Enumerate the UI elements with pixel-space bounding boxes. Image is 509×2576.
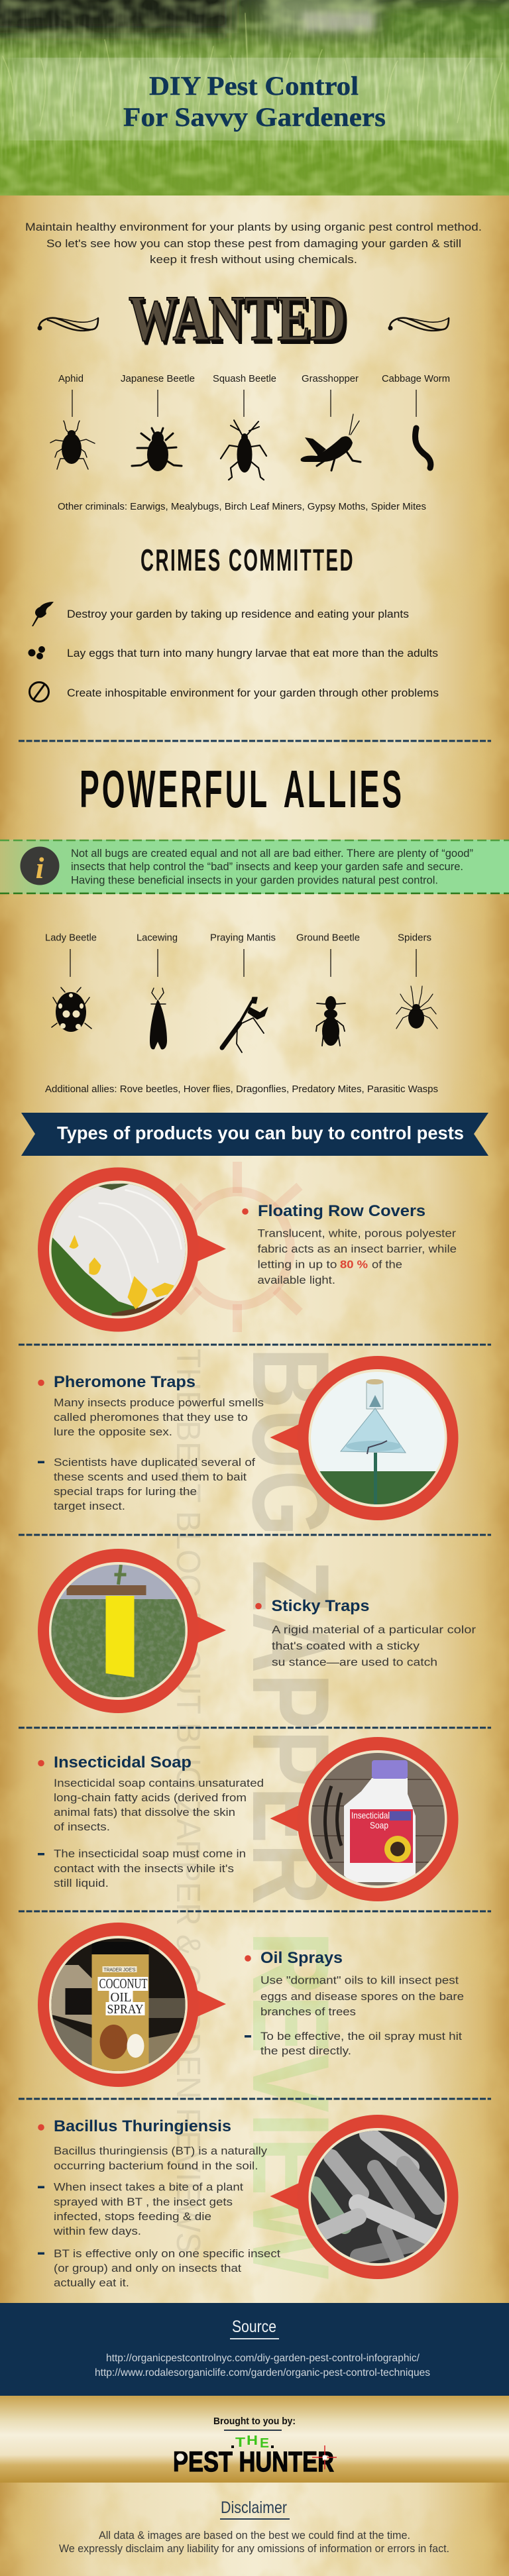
floating row covers text: Floating Row Covers bbox=[258, 1202, 425, 1220]
photo: coconut oil spray: OIL bbox=[110, 1990, 131, 2005]
intro text: So let's see how you can stop these pest from damaging your garden & still bbox=[46, 237, 461, 250]
ornament: right flourish bbox=[388, 318, 449, 331]
translucent title band bbox=[0, 58, 509, 140]
crime list: Create inhospitable environment for your garden through other problems bbox=[67, 687, 439, 699]
insecticidal soap text: Insecticidal Soap bbox=[54, 1754, 192, 1771]
sticky traps text: su stance—are used to catch bbox=[272, 1655, 437, 1669]
ally labels: Spiders bbox=[398, 932, 431, 944]
photo: floating row cover bbox=[38, 1168, 226, 1332]
icon: cabbage worm bbox=[415, 428, 431, 468]
logo: the pest hunter: E bbox=[260, 2436, 269, 2451]
pest labels: Aphid bbox=[58, 373, 84, 384]
oil sprays text: eggs and disease spores on the bare bbox=[260, 1990, 464, 2003]
pest labels: Japanese Beetle bbox=[121, 373, 195, 384]
bacillus thuringiensis text: occurring bacterium found in the soil. bbox=[54, 2159, 258, 2172]
bacillus thuringiensis text: infected, stops feeding & die bbox=[54, 2210, 211, 2223]
bacillus thuringiensis text: Bacillus thuringiensis (BT) is a naturally bbox=[54, 2145, 268, 2157]
pheromone traps text: special traps for luring the bbox=[54, 1485, 197, 1498]
wanted heading: WANTED bbox=[130, 286, 349, 357]
icon: japanese beetle bbox=[132, 428, 182, 471]
disclaimer bbox=[59, 2498, 449, 2555]
insecticidal soap text: contact with the insects while it's bbox=[54, 1862, 234, 1875]
insecticidal soap text: The insecticidal soap must come in bbox=[54, 1848, 246, 1860]
logo: the pest hunter: PEST HUNTER bbox=[173, 2446, 334, 2478]
photo: coconut oil spray: SPRAY bbox=[107, 2002, 143, 2017]
crime list bbox=[28, 602, 439, 701]
floating row covers text: available light. bbox=[257, 1274, 335, 1286]
source section: Source bbox=[232, 2318, 276, 2336]
title bbox=[123, 71, 386, 132]
photo: sticky trap bbox=[38, 1549, 226, 1713]
icon: lacewing bbox=[150, 988, 167, 1050]
header: grass photo bbox=[0, 0, 509, 196]
photo: pheromone trap bbox=[270, 1356, 459, 1520]
photo: insecticidal soap bottle: Insecticidal bbox=[351, 1810, 390, 1820]
bacillus thuringiensis text: When insect takes a bite of a plant bbox=[54, 2180, 243, 2194]
oil sprays text: the pest directly. bbox=[260, 2044, 351, 2057]
pest labels: Grasshopper bbox=[302, 373, 359, 384]
pheromone traps text: called pheromones that they use to bbox=[54, 1411, 248, 1424]
pest labels bbox=[58, 373, 450, 417]
pheromone traps text: these scents and used them to bait bbox=[54, 1471, 247, 1483]
icon: chewed leaf bbox=[32, 602, 54, 626]
icon: prohibited sign bbox=[29, 683, 49, 701]
oil sprays text: To be effective, the oil spray must hit bbox=[260, 2030, 462, 2043]
icon: praying mantis bbox=[222, 997, 268, 1052]
logo: the pest hunter: T bbox=[235, 2436, 245, 2450]
banner: types of products: Types of products you can buy to control pests bbox=[57, 1123, 464, 1143]
disclaimer: We expressly disclaim any liability for any omissions of information or errors in fact. bbox=[59, 2542, 449, 2555]
pheromone traps text: Scientists have duplicated several of bbox=[54, 1456, 255, 1469]
source section bbox=[0, 2303, 509, 2396]
info band: Not all bugs are created equal and not all are bad either. There are plenty of “good” bbox=[71, 847, 473, 860]
bacillus thuringiensis text: (or group) and only on insects that bbox=[54, 2262, 241, 2274]
photo: coconut oil spray: TRADER JOE'S bbox=[103, 1968, 136, 1972]
insecticidal soap text: animal fats) that dissolve the skin bbox=[54, 1806, 235, 1819]
faint bug zapper watermark bbox=[170, 1162, 352, 2279]
floating row covers text: of the bbox=[372, 1258, 402, 1271]
icon: grasshopper bbox=[301, 414, 361, 471]
wanted heading: WANTED bbox=[129, 283, 346, 354]
oil sprays text bbox=[245, 1949, 464, 2057]
icon: ground beetle bbox=[316, 996, 345, 1046]
ally labels: Lady Beetle bbox=[45, 932, 97, 944]
bacillus thuringiensis text bbox=[38, 2117, 280, 2289]
icon: lady beetle bbox=[52, 987, 91, 1032]
wanted heading: WANTED bbox=[131, 287, 349, 358]
pest labels: Cabbage Worm bbox=[382, 373, 450, 384]
title: DIY Pest Control bbox=[149, 71, 359, 101]
insecticidal soap text: of insects. bbox=[54, 1820, 110, 1833]
faint bug zapper watermark: REVIEW bbox=[230, 1931, 352, 2279]
sticky traps text: that's coated with a sticky bbox=[272, 1640, 420, 1652]
bacillus thuringiensis text: BT is effective only on one specific insect bbox=[54, 2247, 280, 2260]
ornament: left flourish bbox=[38, 318, 98, 331]
sticky traps text bbox=[255, 1597, 476, 1669]
brought to you by band bbox=[0, 2396, 509, 2483]
ally labels: Lacewing bbox=[137, 932, 178, 944]
intro text bbox=[25, 221, 482, 266]
other criminals: Other criminals: Earwigs, Mealybugs, Birch Leaf Miners, Gypsy Moths, Spider Mites bbox=[58, 501, 426, 512]
logo: the pest hunter: H bbox=[247, 2434, 258, 2448]
brought to you by band: Brought to you by: bbox=[213, 2416, 296, 2427]
photo: insecticidal soap bottle bbox=[270, 1737, 459, 1901]
icon: squash beetle bbox=[221, 420, 266, 480]
floating row covers text: fabric acts as an insect barrier, while bbox=[257, 1243, 457, 1255]
source section: http://organicpestcontrolnyc.com/diy-garden-pest-control-infographic/ bbox=[106, 2353, 420, 2364]
pheromone traps text: Pheromone Traps bbox=[54, 1373, 196, 1391]
title: For Savvy Gardeners bbox=[123, 102, 386, 132]
insecticidal soap text: Insecticidal soap contains unsaturated bbox=[54, 1777, 264, 1789]
icon: eggs bbox=[28, 646, 45, 659]
photo: coconut oil spray: COCONUT bbox=[99, 1976, 148, 1991]
icon: info bbox=[20, 847, 60, 885]
floating row covers text: 80 % bbox=[340, 1258, 368, 1271]
ally labels bbox=[45, 932, 431, 977]
faint bug zapper watermark: BUG ZAPPER bbox=[230, 1347, 352, 1905]
photo: insecticidal soap bottle: Soap bbox=[370, 1820, 388, 1830]
pest labels: Squash Beetle bbox=[213, 373, 276, 384]
crime list: Destroy your garden by taking up residence and eating your plants bbox=[67, 608, 409, 620]
floating row covers text bbox=[242, 1202, 457, 1286]
info band bbox=[0, 840, 509, 894]
insecticidal soap text bbox=[38, 1754, 264, 1889]
photo: coconut oil spray bbox=[38, 1923, 226, 2087]
bacillus thuringiensis text: within few days. bbox=[53, 2225, 141, 2237]
crime list: Lay eggs that turn into many hungry larvae that eat more than the adults bbox=[67, 647, 438, 659]
icon: spider bbox=[396, 986, 437, 1029]
disclaimer: All data & images are based on the best we could find at the time. bbox=[99, 2529, 410, 2542]
crimes committed heading: CRIMES COMMITTED bbox=[141, 543, 355, 577]
additional allies: Additional allies: Rove beetles, Hover flies, Dragonflies, Predatory Mites, Parasitic Wasps bbox=[45, 1084, 438, 1095]
faint bug zapper watermark: THE BEST BLOG ABOUT BUG ZAPPER & GARDEN REVIEWS bbox=[170, 1349, 207, 2253]
bacillus thuringiensis text: actually eat it. bbox=[54, 2276, 129, 2289]
photo: bacillus microscope image bbox=[270, 2115, 459, 2279]
banner: types of products bbox=[21, 1113, 488, 1156]
intro text: Maintain healthy environment for your plants by using organic pest control method. bbox=[25, 221, 482, 233]
pheromone traps text bbox=[38, 1373, 264, 1512]
oil sprays text: Oil Sprays bbox=[260, 1949, 343, 1967]
floating row covers text: letting in up to bbox=[257, 1258, 337, 1271]
insecticidal soap text: still liquid. bbox=[54, 1877, 109, 1889]
oil sprays text: branches of trees bbox=[260, 2005, 356, 2018]
sticky traps text: A rigid material of a particular color bbox=[272, 1624, 476, 1636]
info band: Having these beneficial insects in your garden provides natural pest control. bbox=[71, 873, 438, 887]
insecticidal soap text: long-chain fatty acids (derived from bbox=[54, 1791, 247, 1804]
info band: insects that help control the “bad” insects and keep your garden safe and secure. bbox=[71, 860, 463, 873]
pheromone traps text: target insect. bbox=[54, 1500, 125, 1512]
source section: http://www.rodalesorganiclife.com/garden/organic-pest-control-techniques bbox=[95, 2367, 430, 2379]
disclaimer: Disclaimer bbox=[221, 2498, 287, 2517]
floating row covers text: Translucent, white, porous polyester bbox=[257, 1227, 456, 1239]
sticky traps text: Sticky Traps bbox=[272, 1597, 370, 1615]
intro text: keep it fresh without using chemicals. bbox=[150, 253, 357, 266]
logo: the pest hunter bbox=[173, 2434, 337, 2478]
ally labels: Praying Mantis bbox=[210, 932, 276, 944]
pheromone traps text: lure the opposite sex. bbox=[54, 1426, 172, 1438]
icon: info: i bbox=[36, 851, 44, 885]
pheromone traps text: Many insects produce powerful smells bbox=[54, 1396, 264, 1409]
bacillus thuringiensis text: sprayed with BT , the insect gets bbox=[54, 2196, 233, 2208]
icon: aphid bbox=[50, 421, 95, 469]
bacillus thuringiensis text: Bacillus Thuringiensis bbox=[54, 2117, 231, 2135]
ally labels: Ground Beetle bbox=[296, 932, 360, 944]
wanted heading: WANTED bbox=[131, 284, 349, 355]
oil sprays text: Use "dormant" oils to kill insect pest bbox=[260, 1974, 459, 1987]
